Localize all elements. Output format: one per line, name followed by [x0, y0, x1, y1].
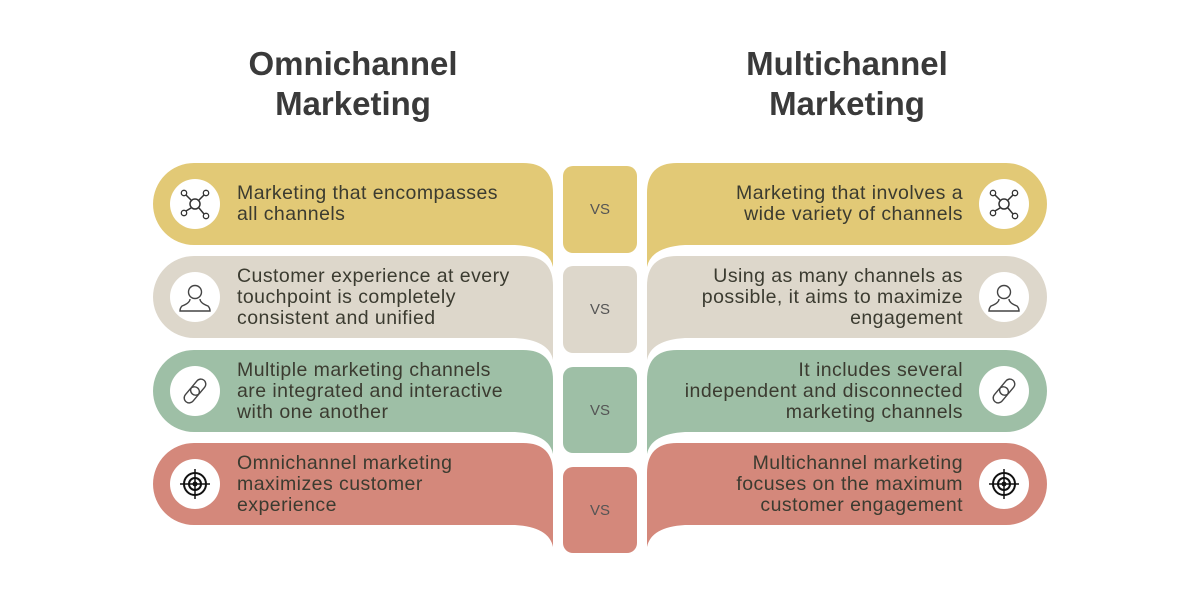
text: omni 4: experience [237, 494, 337, 516]
title: multichannel: Multichannel [746, 45, 948, 82]
text: multi 2: possible, it aims to maximize [702, 286, 963, 308]
text: omni 2: consistent and unified [237, 306, 436, 328]
row 1 shapes [153, 163, 1047, 267]
text: multi 1: Marketing that involves a [736, 182, 963, 204]
text: omni 2: Customer experience at every [237, 264, 510, 286]
text: multi 3: marketing channels [786, 400, 963, 422]
vs 4 [563, 467, 637, 553]
text: omni 3: Multiple marketing channels [237, 358, 491, 380]
text: multi 1 [736, 182, 963, 225]
vs 3: VS [590, 402, 610, 418]
text: omni 1: Marketing that encompasses [237, 182, 498, 204]
text: multi 4: customer engagement [760, 494, 963, 516]
text: multi 3: independent and disconnected [685, 380, 963, 402]
title: multichannel [746, 45, 948, 122]
text: omni 1: all channels [237, 203, 345, 225]
text: omni 1 [237, 182, 498, 225]
text: multi 3 [685, 358, 963, 422]
title: omnichannel: Omnichannel [248, 45, 458, 82]
text: omni 3: are integrated and interactive [237, 380, 503, 402]
text: omni 4: Omnichannel marketing [237, 452, 452, 474]
text: omni 3 [237, 358, 503, 422]
text: omni 2 [237, 264, 510, 328]
vs 3 [563, 367, 637, 453]
text: multi 4: Multichannel marketing [753, 452, 963, 474]
text: omni 4: maximizes customer [237, 472, 423, 494]
text: multi 2: Using as many channels as [713, 264, 963, 286]
vs 1 [563, 166, 637, 253]
vs 2: VS [590, 301, 610, 318]
text: omni 4 [237, 452, 452, 516]
row 4 shapes [153, 443, 1047, 547]
text: multi 2 [702, 264, 963, 328]
text: multi 4: focuses on the maximum [736, 472, 963, 494]
title: omnichannel: Marketing [275, 85, 431, 122]
text: omni 3: with one another [237, 400, 388, 422]
text: omni 2: touchpoint is completely [237, 286, 456, 308]
text: multi 1: wide variety of channels [744, 203, 963, 225]
row 2 shapes [153, 256, 1047, 360]
text: multi 4 [736, 452, 963, 516]
text: multi 2: engagement [850, 306, 963, 328]
vs 2 [563, 266, 637, 353]
row 3 shapes [153, 350, 1047, 454]
vs 1: VS [590, 201, 610, 218]
vs 4: VS [590, 502, 610, 518]
title: omnichannel [248, 45, 458, 122]
title: multichannel: Marketing [769, 85, 925, 122]
text: multi 3: It includes several [798, 358, 963, 380]
